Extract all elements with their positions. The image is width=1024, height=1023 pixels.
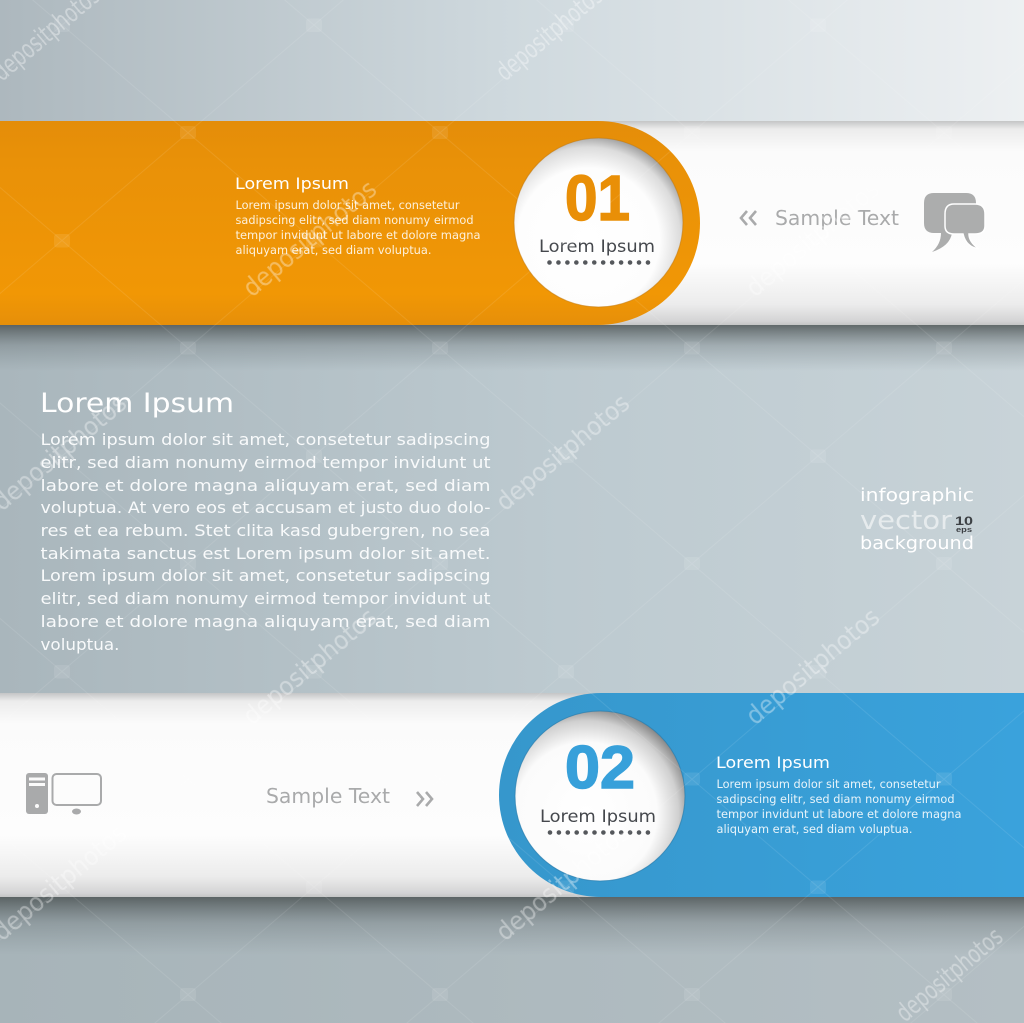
paragraph: res et ea rebum. Stet clita kasd gubergren, no sea (40, 521, 490, 540)
body text: tempor invidunt ut labore et dolore magna (236, 228, 480, 242)
circle label: Lorem Ipsum (539, 237, 655, 257)
arrow: double right (417, 792, 432, 806)
circle cut-out (514, 138, 683, 307)
paragraph: voluptua. At vero eos et accusam et justo duo dolo- (40, 498, 490, 517)
paragraph: voluptua. (40, 635, 120, 654)
badge: infographic vector background: background (860, 533, 974, 554)
paragraph: labore et dolore magna aliquyam erat, sed diam (40, 476, 490, 495)
dots (550, 830, 648, 835)
paragraph: elitr, sed diam nonumy eirmod tempor invidunt ut (40, 453, 490, 472)
watermarks: depositphotos (490, 818, 636, 947)
body text: sadipscing elitr, sed diam nonumy eirmod (236, 213, 474, 227)
panel: main text block (40, 388, 491, 654)
body text (716, 777, 962, 836)
icon: desktop computer (26, 773, 101, 814)
panel: blue banner 02 (0, 693, 1024, 897)
badge: infographic vector background: eps (956, 527, 972, 534)
white band right (600, 121, 1024, 325)
body text: tempor invidunt ut labore et dolore magna (716, 807, 962, 821)
heading: Lorem Ipsum (235, 174, 349, 193)
white band left (0, 693, 610, 897)
badge: infographic vector background (860, 485, 974, 554)
blue band (499, 693, 1024, 897)
icon: speech bubbles (924, 193, 985, 252)
badge: infographic vector background: infographic (860, 485, 974, 506)
watermarks: depositphotos (740, 174, 886, 303)
body text: Lorem ipsum dolor sit amet, consetetur (716, 777, 941, 791)
body text: sadipscing elitr, sed diam nonumy eirmod (716, 792, 954, 806)
orange band (0, 121, 700, 325)
paragraph (40, 430, 491, 654)
circle label: Lorem Ipsum (540, 807, 656, 827)
body text: aliquyam erat, sed diam voluptua. (716, 822, 912, 836)
watermarks: depositphotos (237, 602, 383, 731)
paragraph: labore et dolore magna aliquyam erat, sed diam (40, 612, 490, 631)
panel: orange banner 01 (0, 121, 1024, 325)
badge: infographic vector background: 10 (955, 514, 973, 528)
sample text: Sample Text (775, 206, 899, 230)
paragraph: Lorem ipsum dolor sit amet, consetetur sadipscing (40, 430, 490, 449)
watermarks: depositphotos (237, 174, 383, 303)
body text: aliquyam erat, sed diam voluptua. (236, 243, 432, 257)
body text: Lorem ipsum dolor sit amet, consetetur (236, 198, 460, 212)
arrow: double left (741, 211, 756, 225)
sample text: Sample Text (266, 784, 390, 808)
badge: infographic vector background: vector (860, 506, 952, 536)
watermarks: depositphotos (490, 388, 636, 517)
paragraph: elitr, sed diam nonumy eirmod tempor invidunt ut (40, 589, 490, 608)
number 01: 01 (565, 162, 630, 234)
circle cut-out (515, 711, 685, 881)
heading: Lorem Ipsum (40, 388, 234, 419)
watermarks: depositphotos (740, 602, 886, 731)
number 02: 02 (565, 734, 635, 801)
heading: Lorem Ipsum (716, 753, 830, 772)
dots (550, 260, 648, 265)
paragraph: Lorem ipsum dolor sit amet, consetetur sadipscing (40, 566, 490, 585)
body text (236, 198, 480, 257)
paragraph: takimata sanctus est Lorem ipsum dolor sit amet. (40, 544, 491, 563)
